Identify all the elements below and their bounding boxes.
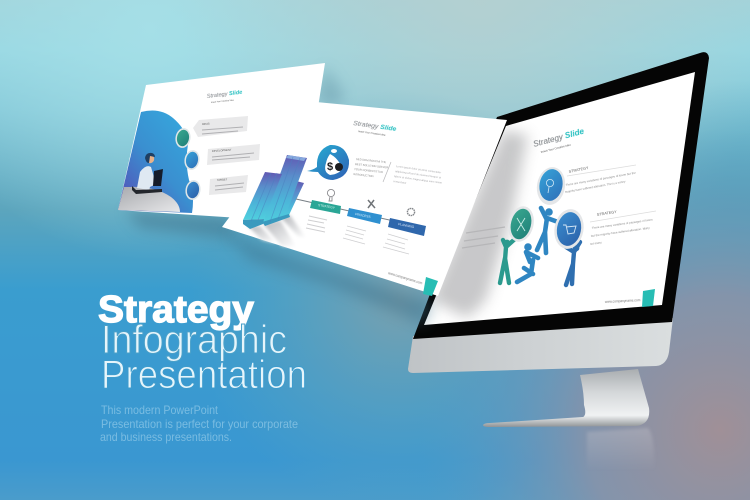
slide two [222, 102, 507, 296]
money bag speech bubble [307, 145, 349, 180]
strategy text two: not many [590, 240, 602, 246]
lower right bar [279, 181, 304, 219]
slide one [118, 63, 325, 222]
left partial text lines [462, 227, 505, 248]
monitor stand reflection [587, 428, 654, 470]
bubble text: YOUR CONSECTETUR [354, 167, 383, 174]
website label: www.companyname.com [388, 271, 423, 285]
person body [137, 166, 156, 190]
slide title: Strategy Slide [532, 127, 586, 149]
slide one title: Strategy Slide [207, 90, 243, 100]
box: process: PROCESS [355, 212, 371, 219]
icon: gear [407, 208, 415, 216]
figure: kneeling person head [524, 243, 532, 251]
bar ridges [251, 157, 300, 222]
callout one [193, 116, 248, 137]
keyboard desk [132, 186, 162, 194]
callout three [209, 175, 248, 195]
description text: Lorem ipsum dolor sit amet consectetur [396, 164, 442, 174]
bubble text: SED DOM ROCCMI THE [356, 157, 387, 164]
bar top highlight [286, 155, 306, 161]
heading: Infographic: Infographic [101, 318, 287, 362]
person head [146, 155, 154, 163]
bar shadow two [263, 220, 296, 247]
description [100, 403, 298, 444]
computer monitor [153, 169, 163, 186]
website label: www.companyname.com [605, 298, 641, 304]
divider [383, 162, 391, 182]
figure: kneeling person [517, 252, 538, 282]
description: and business presentations. [100, 430, 232, 444]
slide one page [118, 63, 325, 222]
description text: consectetur [393, 179, 407, 185]
icon: lightbulb [327, 189, 335, 201]
box: planning: PLANNING [398, 222, 415, 229]
description: This modern PowerPoint [101, 403, 219, 417]
money bag speech bubble: $ [327, 161, 333, 173]
icon badge blue [183, 149, 201, 171]
shadow under slide one [125, 210, 240, 240]
monitor stand [483, 369, 649, 427]
box: planning [388, 218, 426, 236]
monitor bezel [413, 52, 709, 339]
heading: Strategy: Strategy [98, 289, 254, 331]
slide two page [222, 102, 507, 296]
headline [98, 289, 307, 397]
strategy text one: There are many variations of passages of lorem but the [565, 171, 636, 187]
grey desk base [118, 187, 180, 212]
shadow under slide two [225, 232, 432, 325]
bubble text: BEST SOLUTION SOEVER [355, 162, 389, 169]
circle: tools [505, 204, 537, 244]
person at desk [132, 153, 163, 194]
figure: green person [500, 238, 516, 283]
slide subtitle: Insert Your Creative Idea [540, 143, 572, 154]
icon badge teal [174, 127, 192, 149]
description text: labore et dolore magna aliqua enim minim [394, 174, 442, 185]
teal page tag [423, 277, 438, 296]
right bar base [262, 214, 290, 226]
slide on screen [462, 127, 656, 307]
shadow behind slide one top edge [316, 66, 345, 110]
box: strategy [310, 200, 341, 214]
figure: right person [566, 242, 580, 285]
strategy text one: STRATEGY [568, 166, 589, 174]
bubble text: INTRODUCTION [353, 172, 374, 178]
column text three [383, 234, 409, 254]
bar chart [243, 155, 307, 229]
slide two subtitle: Insert Your Creative Idea [358, 130, 386, 137]
box: strategy: STRATEGY [318, 203, 336, 210]
column text two [343, 226, 366, 244]
figure: green person head [504, 240, 510, 246]
callout three: TARGET [217, 177, 228, 182]
left bar [243, 172, 282, 220]
strategy text one [564, 165, 636, 194]
tall bar [262, 155, 307, 224]
strategy text two: STRATEGY [597, 210, 618, 217]
bar shadow three [281, 215, 306, 238]
callout two [207, 144, 260, 165]
icon badge dark blue [184, 179, 202, 201]
heading: Presentation: Presentation [101, 353, 307, 397]
monitor chin [408, 318, 673, 373]
monitor [408, 52, 709, 470]
connector line [296, 199, 425, 228]
monitor screen [424, 72, 695, 325]
icon: tools [368, 200, 375, 208]
strategy text two: There are many variations of passages of lorem [592, 217, 653, 230]
circle: bulb [534, 165, 568, 207]
bubble text [353, 157, 389, 178]
description: Presentation is perfect for your corporate [101, 417, 298, 431]
callout two: DEVELOPMENT [212, 148, 232, 153]
slide two title: Strategy Slide [353, 120, 397, 133]
left bar base [243, 219, 264, 229]
figure: reaching person [537, 208, 558, 253]
strategy text two: but the majority have suffered alteration. Many [591, 226, 651, 238]
blue blob panel [118, 110, 193, 213]
strategy text two [590, 210, 656, 246]
column text one [306, 216, 327, 232]
circle: cart [551, 207, 587, 251]
screen shadow from floating slide [430, 130, 528, 318]
description text: adipiscing elit sed do eiusmod tempor ut [395, 169, 442, 179]
strategy text one: majority have suffered alteration. The is a sunny [564, 179, 626, 194]
person hair [145, 153, 155, 163]
bar shadow one [248, 226, 276, 243]
figure: right person head [573, 245, 579, 251]
description text [393, 164, 442, 185]
slide one subtitle: Insert Your Creative Idea [211, 99, 235, 104]
callout one: IDEAS [202, 121, 210, 126]
figure: reaching person head [545, 208, 553, 216]
teal page tag [642, 289, 655, 307]
box: process [347, 208, 382, 224]
